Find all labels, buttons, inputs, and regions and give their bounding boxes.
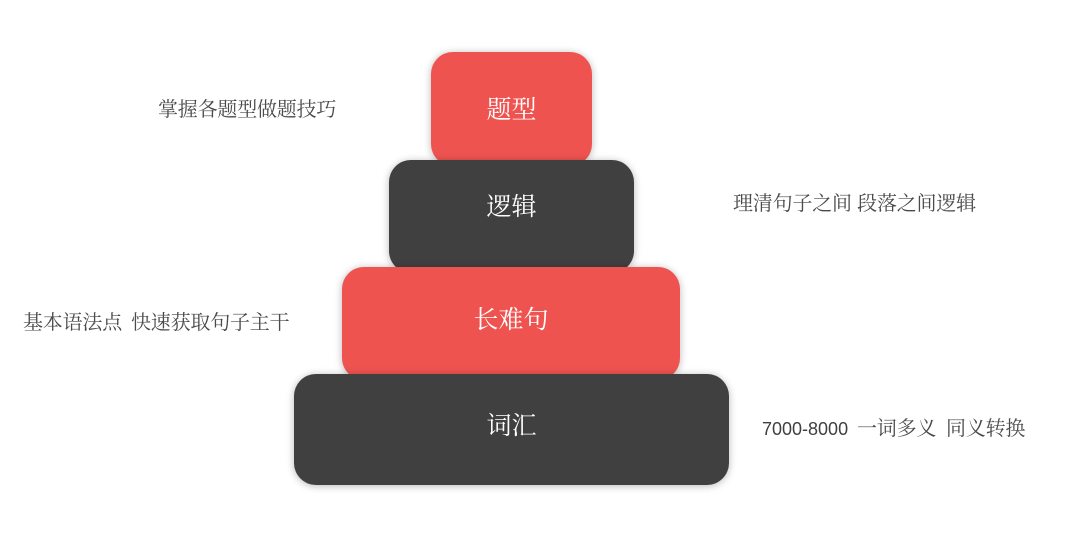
- tier 3: 逻辑 block: [389, 160, 634, 273]
- label: 长难句 description: [23, 312, 289, 334]
- tier 2: 长难句 block: 长难句: [473, 306, 548, 334]
- label: 词汇 description: 同义转换: [946, 418, 1025, 440]
- label: 词汇 description: [762, 418, 1025, 440]
- tier 4: 题型 block: 题型: [486, 96, 536, 124]
- tier 4: 题型 block: [431, 52, 592, 166]
- label: 逻辑 description: 理清句子之间 段落之间逻辑: [733, 193, 976, 215]
- tier 3: 逻辑 block: 逻辑: [486, 193, 536, 221]
- label: 长难句 description: 基本语法点: [23, 312, 122, 334]
- label: 词汇 description: 7000-8000: [762, 419, 848, 439]
- tier 2: 长难句 block: [342, 267, 680, 380]
- tier 1: 词汇 block: [294, 374, 729, 485]
- tier 1: 词汇 block: 词汇: [486, 412, 536, 440]
- label: 长难句 description: 快速获取句子主干: [131, 312, 289, 334]
- label: 词汇 description: 一词多义: [857, 418, 936, 440]
- label: 题型 description: 掌握各题型做题技巧: [158, 99, 336, 121]
